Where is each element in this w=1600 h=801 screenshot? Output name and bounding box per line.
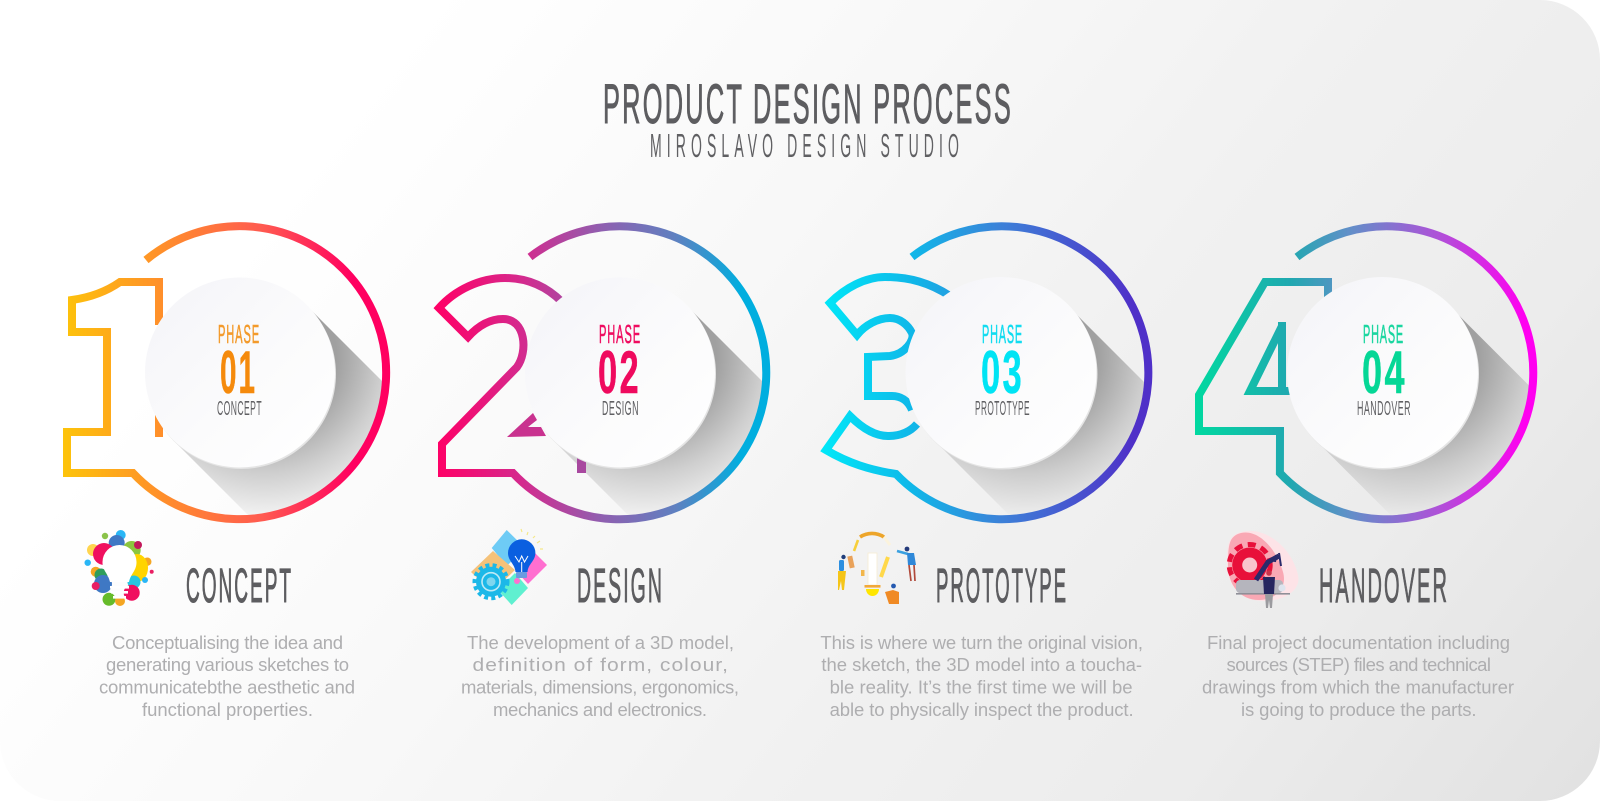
infographic canvas: PRODUCT DESIGN PROCESS (603, 72, 1013, 135)
panel: phase 2 graphic: DESIGN (602, 398, 639, 420)
panel: phase 1 graphic (63, 222, 390, 524)
panel: phase 1 graphic: CONCEPT (217, 398, 262, 420)
numeral 3 with ring (826, 226, 1148, 519)
phase number 02: 02 (598, 339, 641, 406)
text: handover description: sources (STEP) files and technical (1226, 654, 1491, 675)
icon: colourful light bulb (84, 530, 154, 606)
disk: phase 2 (525, 278, 715, 468)
text: design description (461, 632, 739, 720)
numeral 2 inner fragment (507, 413, 546, 437)
text: design description: materials, dimensions, ergonomics, (461, 676, 739, 698)
text: concept description: functional properties. (142, 699, 313, 720)
infographic canvas: MIROSLAVO DESIGN STUDIO (650, 127, 964, 164)
panel: phase 1 graphic: PHASE (218, 319, 260, 349)
text: handover description: is going to produce the parts. (1241, 699, 1476, 720)
numeral 2 with ring (439, 226, 766, 519)
text: prototype description: This is where we turn the original vision, (820, 632, 1143, 653)
text: handover description: drawings from which the manufacturer (1202, 676, 1514, 698)
text: handover description (1202, 632, 1514, 720)
icon: puzzle, gear and bulb (471, 529, 547, 605)
phase number 03: 03 (981, 339, 1024, 406)
numeral 1 with ring (67, 226, 386, 519)
panel: phase 4 graphic: PHASE (1363, 319, 1404, 349)
panel: phase 4 graphic: HANDOVER (1357, 398, 1411, 420)
text: design description: mechanics and electronics. (493, 699, 707, 720)
numeral 2 stem fragment (577, 458, 586, 473)
phase number 04: 04 (1362, 339, 1407, 406)
icon: people building a bulb (838, 533, 916, 604)
panel: phase 3 graphic: PROTOTYPE (975, 398, 1030, 420)
text: prototype description (820, 632, 1143, 720)
text: prototype description: the sketch, the 3D model into a toucha- (821, 654, 1142, 675)
icon: gear, robot arm and person (1227, 531, 1298, 608)
disk: phase 4 (1287, 277, 1478, 468)
disk: phase 3 (906, 277, 1096, 468)
text: design description: The development of a 3D model, (467, 632, 734, 653)
text: concept description: Conceptualising the idea and (112, 632, 343, 653)
panel: phase 4 graphic (1195, 222, 1538, 524)
panel: phase 3 graphic: PHASE (982, 319, 1023, 349)
panel: phase 1 graphic: 01 (220, 339, 257, 406)
panel: phase 2 graphic (434, 222, 770, 524)
disk: phase 1 (145, 278, 335, 468)
text: concept description: generating various sketches to (106, 654, 349, 675)
infographic canvas: DESIGN (577, 560, 664, 613)
numeral 4 with ring (1199, 226, 1533, 519)
text: concept description: communicatebthe aesthetic and (99, 676, 355, 698)
infographic canvas: CONCEPT (186, 560, 293, 613)
text: prototype description: ble reality. It’s the first time we will be (830, 676, 1133, 698)
infographic canvas: PROTOTYPE (936, 560, 1068, 613)
text: concept description (99, 632, 355, 720)
panel: phase 2 graphic: PHASE (599, 319, 641, 349)
panel: phase 3 graphic (820, 222, 1152, 524)
text: prototype description: able to physically inspect the product. (830, 699, 1134, 720)
text: design description: definition of form, colour, (472, 654, 729, 675)
text: handover description: Final project documentation including (1207, 632, 1510, 653)
